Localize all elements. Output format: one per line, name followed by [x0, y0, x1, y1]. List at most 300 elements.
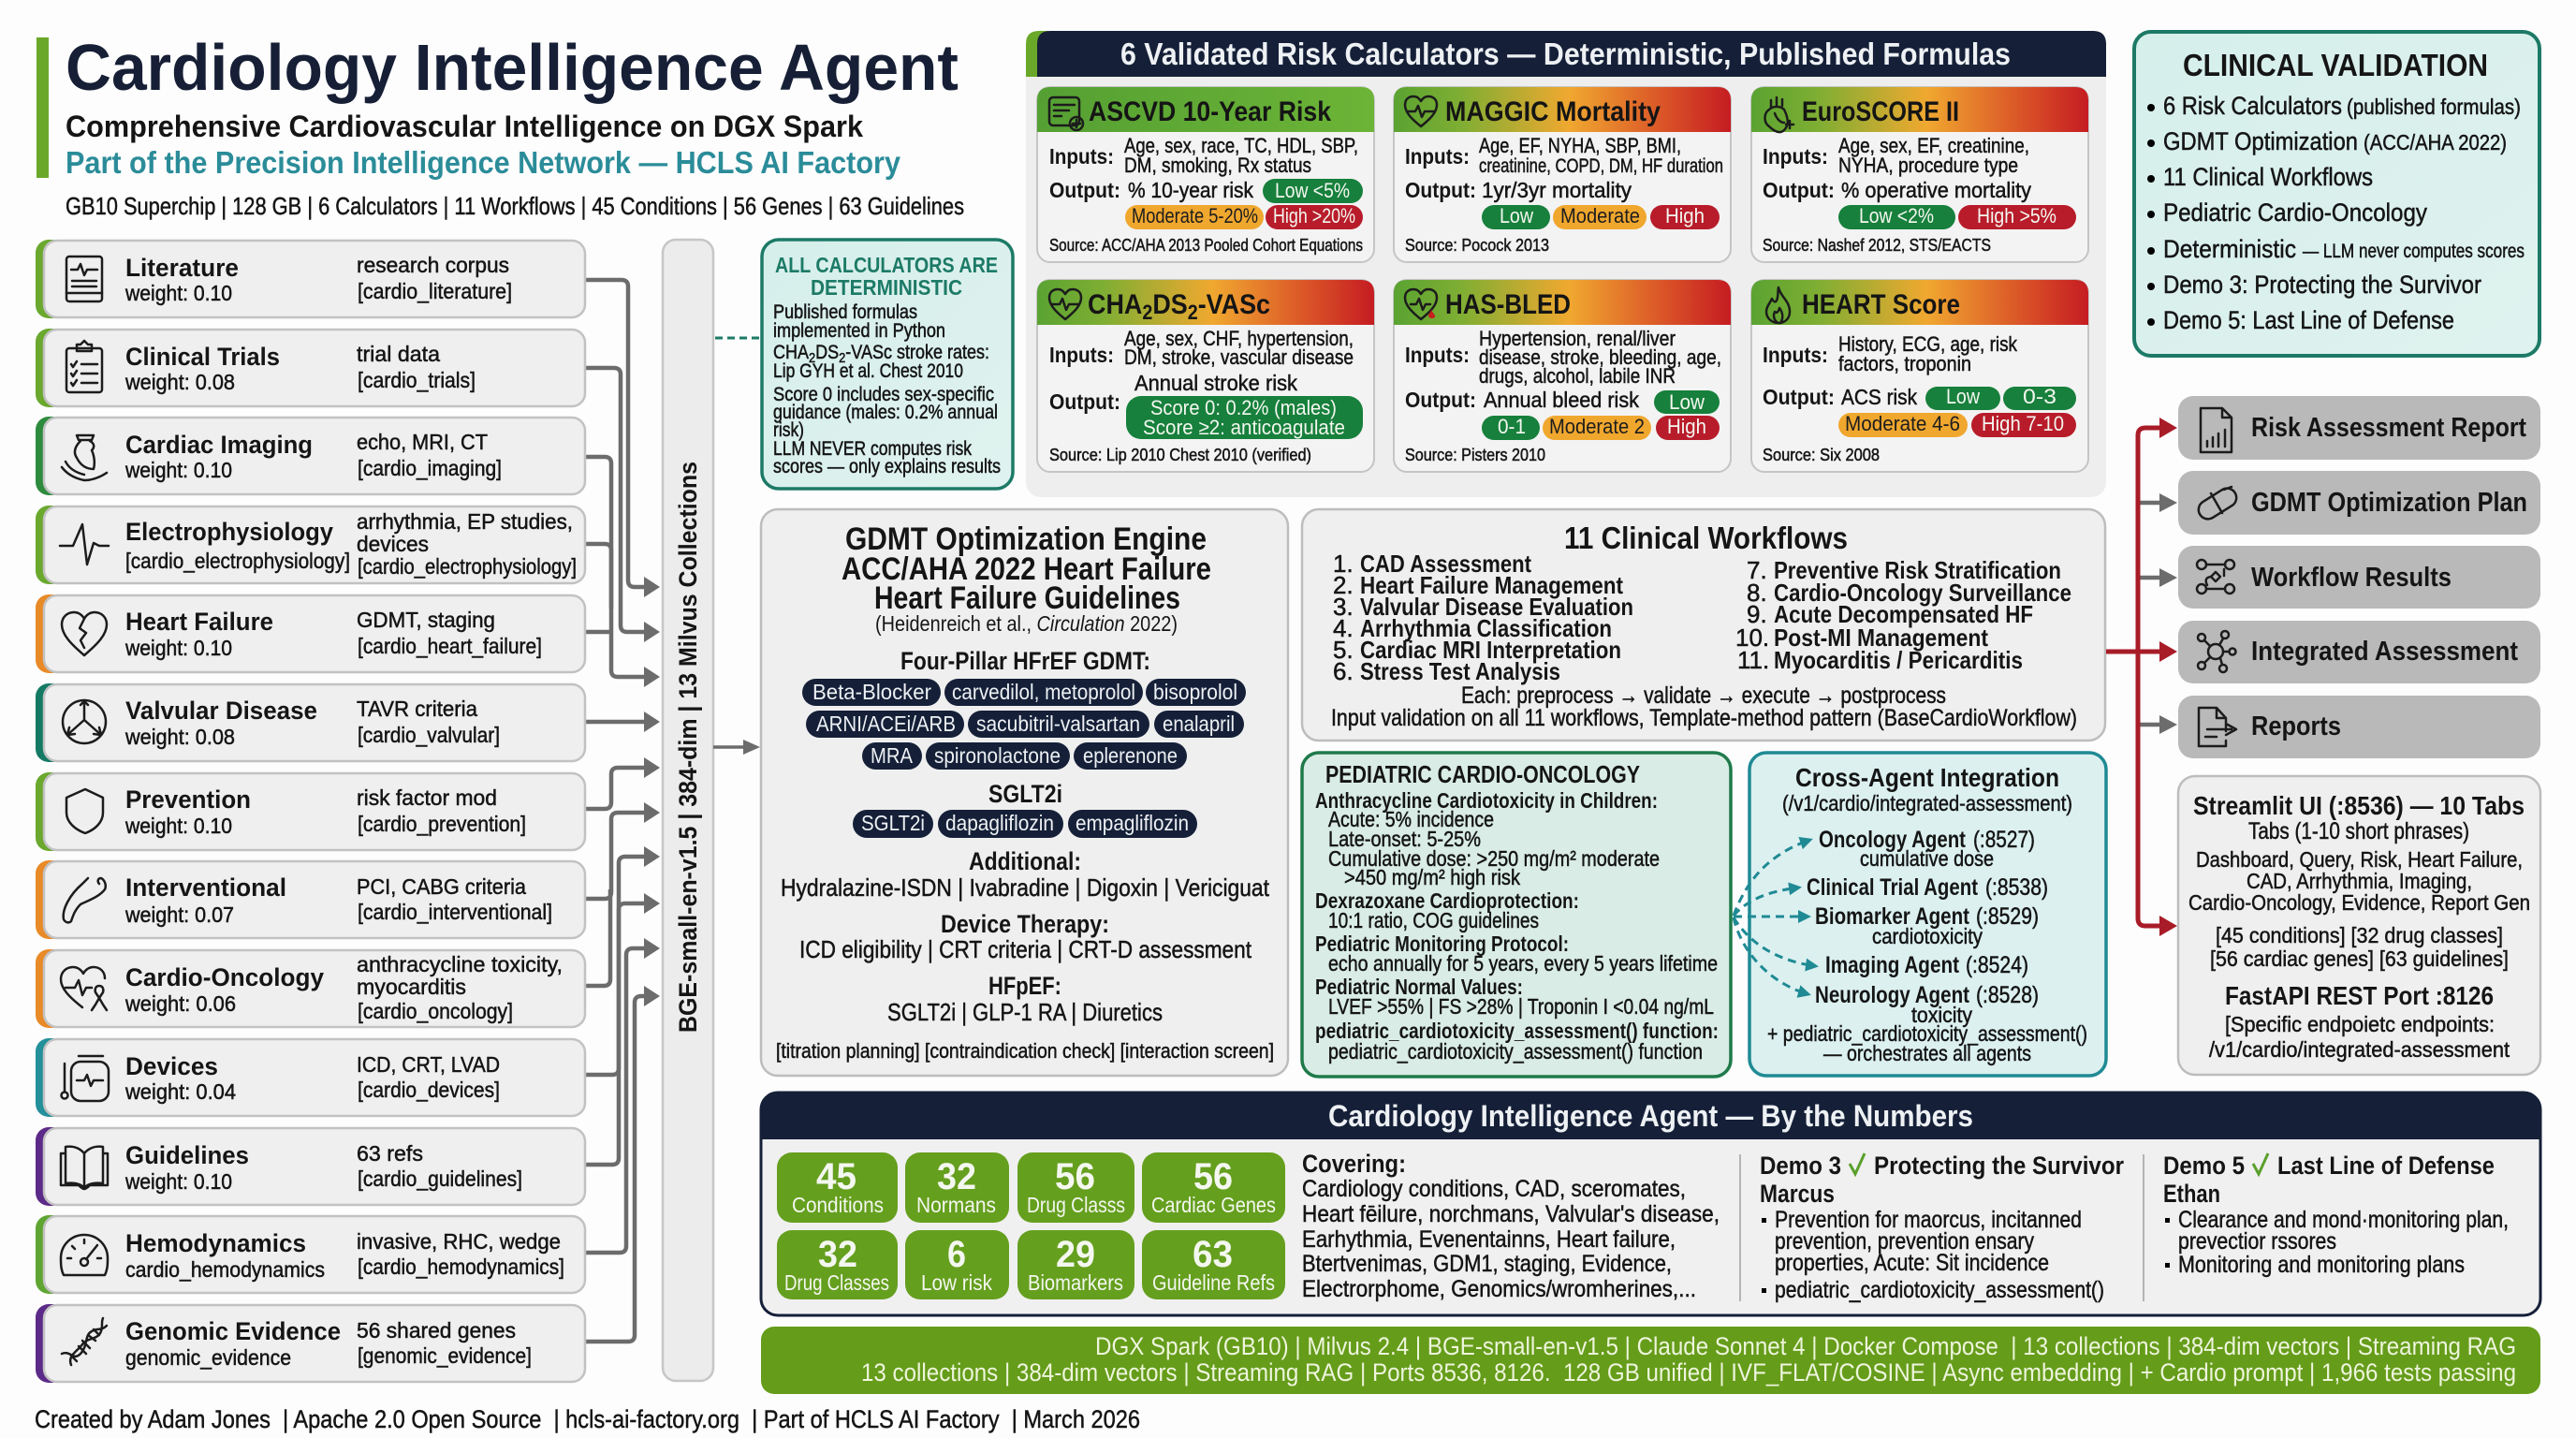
callout: all calculators are deterministic: guidance (males: 0.2% annual: [773, 402, 998, 423]
panel: pediatric cardio-oncology: pediatric_cardiotoxicity_assessment() function:: [1315, 1019, 1719, 1043]
demo 5: Last Line of Defense: [2277, 1152, 2495, 1180]
collection: Genomic Evidence: Genomic Evidence: [125, 1317, 341, 1345]
output: GDMT Optimization Plan: [2178, 471, 2540, 535]
collection: Electrophysiology: [cardio_electrophysiology]: [125, 549, 350, 573]
covering list: Btertvenimas, GDM1, staging, Evidence,: [1302, 1251, 1672, 1277]
title: Cardiology Intelligence Agent: [66, 31, 959, 104]
card: HEART Score: Low: [1946, 385, 1980, 408]
card: MAGGIC: Inputs:: [1405, 144, 1470, 169]
callout: all calculators are deterministic: -VASc stroke rates:: [845, 342, 989, 363]
drug pills: pillars: sacubitril-valsartan: [976, 712, 1140, 736]
stat tiles: [777, 1152, 1285, 1299]
output: Workflow Results: [2178, 546, 2540, 609]
card: CHA2DS2-VASc: DS: [1152, 289, 1188, 320]
panel: clinical workflows: Cardio-Oncology Surveillance: [1774, 579, 2071, 607]
demo 3: Demo 3: [1760, 1152, 1841, 1180]
drug pills: pillars: eplerenone: [1083, 743, 1178, 768]
icon: ECG trace: [60, 524, 109, 565]
panel: pediatric cardio-oncology: Pediatric Normal Values:: [1315, 975, 1523, 999]
collection: Clinical Trials: [36, 329, 585, 407]
card: CHA2DS2-VASc: 2: [1142, 301, 1152, 324]
card: EuroSCORE II: High >5%: [1977, 204, 2056, 227]
collection: Cardio-Oncology: weight: 0.06: [124, 991, 236, 1016]
panel: GDMT optimization engine: Four-Pillar HFrEF GDMT:: [900, 647, 1150, 675]
card: HAS-BLED: disease, stroke, bleeding, age,: [1479, 345, 1721, 369]
card: HAS-BLED: HAS-BLED: [1445, 289, 1571, 320]
collection: Clinical Trials: Clinical Trials: [125, 343, 280, 371]
panel: pediatric cardio-oncology: Anthracycline Cardiotoxicity in Children:: [1315, 788, 1658, 813]
card: MAGGIC: [1394, 87, 1731, 262]
collection: Interventional: [cardio_interventional]: [358, 900, 552, 924]
callout: all calculators are deterministic: LLM NEVER computes risk: [773, 438, 972, 460]
panel: Streamlit UI and FastAPI: [56 cardiac genes] [63 guidelines]: [2210, 946, 2509, 971]
collection: Valvular Disease: Valvular Disease: [125, 697, 317, 725]
stats line: GB10 Superchip | 128 GB | 6 Calculators | 11 Workflows | 45 Conditions | 56 Genes | 63 Guidelines: [66, 192, 964, 220]
panel: clinical validation: Deterministic: [2163, 235, 2296, 263]
callout: all calculators are deterministic: Published formulas: [773, 301, 917, 323]
panel: cross-agent integration: [1734, 753, 2106, 1076]
collection: Prevention: [cardio_prevention]: [358, 812, 526, 836]
icon: catheter: [64, 878, 106, 922]
icon: shield: [66, 789, 103, 833]
panel: Streamlit UI and FastAPI: [45 conditions] [32 drug classes]: [2216, 923, 2503, 947]
panel: clinical workflows: [1302, 509, 2105, 741]
panel: GDMT optimization engine: HFpEF:: [988, 972, 1061, 1000]
collection: Electrophysiology: [36, 506, 585, 584]
collection: Heart Failure: [cardio_heart_failure]: [358, 634, 542, 658]
card: HEART Score: HEART Score: [1802, 289, 1960, 320]
card: HEART Score: Moderate 4-6: [1845, 412, 1960, 435]
icon: clipboard plus: [1049, 97, 1083, 130]
covering list: Cardiology conditions, CAD, sceromates,: [1302, 1176, 1686, 1202]
collection: Hemodynamics: Hemodynamics: [125, 1229, 306, 1257]
card: CHA2DS2-VASc: -VASc: [1198, 289, 1270, 320]
collection: Valvular Disease: [36, 683, 585, 762]
dashed agent arrows: [1734, 840, 1816, 994]
collection: Heart Failure: [36, 594, 585, 673]
panel: clinical workflows: Input validation on all 11 workflows, Template-method pattern (BaseCardioWorkflow): [1331, 705, 2077, 731]
output: Workflow Results: Workflow Results: [2251, 563, 2452, 593]
panel: clinical workflows: 3.: [1333, 593, 1354, 621]
card: HEART Score: Inputs:: [1763, 343, 1828, 367]
drug pills: SGLT2i: dapagliflozin: [945, 811, 1054, 835]
collection: Clinical Trials: [cardio_trials]: [358, 368, 476, 392]
card: HEART Score: Source: Six 2008: [1763, 446, 1880, 464]
card: HAS-BLED: Moderate 2: [1549, 415, 1645, 438]
panel: Streamlit UI and FastAPI: Tabs (1-10 short phrases): [2248, 818, 2469, 844]
demo 3: Prevention for maorcus, incitanned: [1775, 1207, 2082, 1233]
panel: pediatric cardio-oncology: >450 mg/m² high risk: [1344, 865, 1520, 889]
panel: knowledge collections: [36, 240, 585, 1383]
stat tiles: Drug Classes: [784, 1270, 889, 1295]
card: HAS-BLED: drugs, alcohol, labile INR: [1479, 364, 1676, 388]
card: CHA2DS2-VASc: Inputs:: [1049, 343, 1114, 367]
panel: cross-agent integration: toxicity: [1911, 1003, 1972, 1027]
collection: Literature: research corpus: [357, 253, 509, 277]
panel: clinical workflows: Myocarditis / Pericarditis: [1774, 646, 2023, 674]
card: HAS-BLED: 0-1: [1498, 415, 1526, 438]
panel: cross-agent integration: (:8529): [1976, 903, 2039, 930]
collection: Electrophysiology: devices: [357, 532, 429, 556]
calculators header band: [1026, 31, 2106, 77]
demo 3: properties, Acute: Sit incidence: [1775, 1250, 2049, 1276]
card: ASCVD: [1037, 87, 1374, 262]
stat tiles: 6: [947, 1234, 966, 1275]
panel: Streamlit UI and FastAPI: /v1/cardio/integrated-assessment: [2209, 1037, 2510, 1062]
collection: Devices: [36, 1038, 585, 1117]
demo 5: Ethan: [2163, 1180, 2220, 1208]
panel: cross-agent integration: Neurology Agent: [1815, 982, 1970, 1008]
panel: GDMT optimization engine: Hydralazine-ISDN | Ivabradine | Digoxin | Vericiguat: [781, 873, 1270, 902]
collection: Heart Failure: GDMT, staging: [357, 608, 495, 632]
collection: Cardio-Oncology: myocarditis: [357, 975, 466, 999]
card: ASCVD: Source: ACC/AHA 2013 Pooled Cohort Equations: [1049, 236, 1363, 255]
card: EuroSCORE II: Low <2%: [1859, 204, 1934, 227]
output: Reports: Reports: [2251, 712, 2341, 741]
callout: all calculators are deterministic: DS: [815, 342, 839, 363]
icon: heart with blood drop: [1405, 289, 1437, 319]
embedding spine: BGE-small-en-v1.5 | 384-dim | 13 Milvus Collections: [674, 462, 702, 1033]
panel: cross-agent integration: (/v1/cardio/integrated-assessment): [1782, 791, 2072, 815]
callout: all calculators are deterministic: [762, 240, 1013, 489]
output: Risk Assessment Report: [2178, 396, 2540, 460]
card: HAS-BLED: Hypertension, renal/liver: [1479, 327, 1676, 350]
panel: clinical workflows: 11 Clinical Workflows: [1564, 521, 1848, 555]
collection: Electrophysiology: arrhythmia, EP studies,: [357, 509, 573, 534]
stat tiles: Cardiac Genes: [1151, 1193, 1276, 1217]
card: EuroSCORE II: Age, sex, EF, creatinine,: [1838, 134, 2029, 157]
output: Integrated Assessment: [2178, 621, 2540, 683]
callout: all calculators are deterministic: ALL CALCULATORS ARE: [775, 253, 998, 277]
card: HAS-BLED: Source: Pisters 2010: [1405, 446, 1545, 464]
card: ASCVD: ASCVD 10-Year Risk: [1089, 96, 1331, 127]
drug pills: pillars: carvedilol, metoprolol: [952, 680, 1135, 704]
card: MAGGIC: Age, EF, NYHA, SBP, BMI,: [1479, 134, 1681, 157]
panel: GDMT optimization engine: SGLT2i: [988, 780, 1062, 808]
arrow: spine to GDMT: [713, 740, 760, 755]
stat tiles: Conditions: [792, 1193, 884, 1217]
card: ASCVD: Output:: [1049, 178, 1120, 202]
stat tiles: 56: [1055, 1156, 1095, 1197]
collection: Cardiac Imaging: [36, 417, 585, 495]
panel: GDMT optimization engine: ICD eligibility | CRT criteria | CRT-D assessment: [799, 935, 1252, 963]
icon: clipboard: [66, 341, 102, 392]
card: HEART Score: factors, troponin: [1838, 352, 1971, 375]
callout: all calculators are deterministic: 2: [809, 350, 815, 366]
drug pills: pillars: Beta-Blocker: [812, 680, 931, 704]
panel: GDMT optimization engine: (Heidenreich et al., Circulation 2022): [875, 611, 1178, 636]
collection: Interventional: Interventional: [125, 873, 286, 902]
collection: Cardiac Imaging: Cardiac Imaging: [125, 431, 313, 459]
panel: GDMT optimization engine: Device Therapy:: [941, 910, 1109, 938]
panel: clinical validation: 11 Clinical Workflows: [2163, 163, 2373, 191]
collection: Interventional: PCI, CABG criteria: [357, 874, 526, 899]
panel: clinical workflows: 2.: [1333, 571, 1354, 599]
panel: pediatric cardio-oncology: PEDIATRIC CARDIO-ONCOLOGY: [1325, 760, 1640, 788]
icon: pressure gauge: [61, 1235, 108, 1275]
card: MAGGIC: Moderate: [1560, 204, 1640, 227]
collection: Prevention: Prevention: [125, 785, 251, 814]
card: CHA2DS2-VASc: Annual stroke risk: [1134, 371, 1297, 395]
callout: all calculators are deterministic: 2: [839, 350, 845, 366]
panel: pediatric cardio-oncology: echo annually for 5 years, every 5 years lifetime: [1328, 951, 1718, 976]
collection: Literature: [36, 240, 585, 318]
collection: Heart Failure: Heart Failure: [125, 608, 273, 636]
output: GDMT Optimization Plan: GDMT Optimization Plan: [2251, 488, 2527, 518]
panel: clinical workflows: 4.: [1333, 614, 1354, 642]
stat tiles: Guideline Refs: [1152, 1270, 1275, 1295]
drug pills: pillars: [802, 679, 1246, 770]
collection: Hemodynamics: [cardio_hemodynamics]: [358, 1255, 564, 1279]
card: CHA2DS2-VASc: CHA: [1088, 289, 1149, 320]
demo 5: Clearance and mond·monitoring plan,: [2178, 1207, 2509, 1233]
stat tiles: Low risk: [921, 1270, 992, 1295]
arrows: engine to outputs: [2106, 418, 2177, 936]
panel: pediatric cardio-oncology: Acute: 5% incidence: [1328, 807, 1494, 831]
collection: Valvular Disease: weight: 0.08: [124, 725, 235, 749]
panel: clinical workflows: Cardiac MRI Interpretation: [1360, 636, 1621, 664]
drug pills: SGLT2i: [853, 810, 1197, 838]
panel: clinical workflows: Stress Test Analysis: [1360, 657, 1560, 685]
panel: clinical workflows: Arrhythmia Classification: [1360, 614, 1612, 642]
collection: Interventional: weight: 0.07: [124, 902, 234, 927]
panel: clinical validation: GDMT Optimization: [2163, 127, 2358, 155]
panel: clinical workflows: Acute Decompensated HF: [1774, 600, 2033, 628]
panel: clinical workflows: 7.: [1747, 556, 1767, 584]
covering list: [1302, 1150, 1720, 1302]
subtitle: Comprehensive Cardiovascular Intelligence on DGX Spark: [66, 110, 863, 143]
drug pills: pillars: spironolactone: [934, 743, 1061, 768]
card: CHA2DS2-VASc: Output:: [1049, 389, 1120, 414]
callout: all calculators are deterministic: risk): [773, 419, 804, 441]
collection: Cardio-Oncology: anthracycline toxicity,: [357, 952, 563, 976]
collection: Devices: [cardio_devices]: [358, 1078, 500, 1102]
icon: capsule: [2195, 485, 2240, 522]
card: EuroSCORE II: Inputs:: [1763, 144, 1828, 169]
panel: clinical validation: [2134, 32, 2539, 356]
icon: literature document: [66, 257, 102, 301]
panel: cross-agent integration: — orchestrates all agents: [1823, 1041, 2031, 1065]
card: MAGGIC: Low: [1500, 204, 1533, 227]
connector arrows: collections to embedding spine: [585, 280, 660, 1342]
card: ASCVD: Inputs:: [1049, 144, 1114, 169]
panel: clinical workflows: Each: preprocess → validate → execute → postprocess: [1461, 682, 1946, 709]
icon: DNA helix: [62, 1318, 107, 1365]
demo 3: pediatric_cardiotoxicity_assessment(): [1775, 1277, 2104, 1303]
panel: cross-agent integration: Cross-Agent Integration: [1795, 763, 2059, 792]
network tagline: Part of the Precision Intelligence Network — HCLS AI Factory: [66, 145, 901, 180]
panel: cross-agent integration: cardiotoxicity: [1872, 924, 1983, 948]
stat tiles: 63: [1193, 1234, 1233, 1275]
panel: clinical workflows: Preventive Risk Stratification: [1774, 556, 2061, 584]
panel: cross-agent integration: Clinical Trial Agent: [1807, 874, 1979, 901]
card: ASCVD: Moderate 5-20%: [1132, 204, 1258, 227]
covering list: Electrorphome, Genomics/wromherines,...: [1302, 1276, 1696, 1302]
stat tiles: 32: [818, 1234, 857, 1275]
panel: clinical validation: Pediatric Cardio-Oncology: [2163, 198, 2427, 227]
card: ASCVD: Age, sex, race, TC, HDL, SBP,: [1124, 134, 1358, 157]
demo 3: [1760, 1152, 2124, 1303]
collection: Guidelines: weight: 0.10: [124, 1169, 232, 1194]
collection: Genomic Evidence: [36, 1304, 585, 1383]
demo 3: Marcus: [1760, 1180, 1835, 1208]
stat tiles: 56: [1193, 1156, 1233, 1197]
icon: report chart: [2201, 408, 2232, 452]
panel: GDMT optimization engine: [761, 509, 1288, 1076]
collection: Literature: Literature: [125, 254, 239, 282]
calculators header band: 6 Validated Risk Calculators — Deterministic, Published Formulas: [1120, 37, 2011, 71]
icon: workflow nodes: [2197, 560, 2234, 594]
panel: pediatric cardio-oncology: LVEF >55% | FS >28% | Troponin I <0.04 ng/mL: [1328, 994, 1714, 1019]
demo 5: Demo 5: [2163, 1152, 2245, 1180]
card: MAGGIC: Source: Pocock 2013: [1405, 236, 1549, 255]
panel: clinical workflows: Post-MI Management: [1774, 624, 1988, 652]
card: MAGGIC: 1yr/3yr mortality: [1482, 178, 1632, 202]
stat tiles: Drug Classs: [1027, 1193, 1125, 1217]
panel: cross-agent integration: Oncology Agent: [1819, 827, 1967, 853]
card: MAGGIC: creatinine, COPD, DM, HF duration: [1479, 155, 1723, 177]
collection: Valvular Disease: [cardio_valvular]: [358, 723, 500, 747]
icon: open book: [61, 1147, 108, 1189]
card: HAS-BLED: Annual bleed risk: [1484, 388, 1639, 412]
demo 5: prevectior rssores: [2178, 1228, 2336, 1255]
card: HAS-BLED: [1394, 280, 1731, 472]
panel: pediatric cardio-oncology: [1302, 753, 1731, 1077]
card: EuroSCORE II: Output:: [1763, 178, 1835, 202]
panel: GDMT optimization engine: Heart Failure Guidelines: [874, 580, 1180, 616]
card: EuroSCORE II: % operative mortality: [1841, 178, 2031, 202]
collection: Genomic Evidence: 56 shared genes: [357, 1318, 516, 1343]
collection: Genomic Evidence: [genomic_evidence]: [358, 1343, 532, 1368]
tech stack bar: [761, 1327, 2540, 1394]
collection: Cardiac Imaging: weight: 0.10: [124, 458, 232, 482]
card: CHA2DS2-VASc: 2: [1188, 301, 1198, 324]
panel: clinical validation: (ACC/AHA 2022): [2364, 130, 2507, 154]
collection: Heart Failure: weight: 0.10: [124, 636, 232, 660]
drug pills: SGLT2i: SGLT2i: [861, 811, 925, 835]
panel: by the numbers: [761, 1093, 2540, 1315]
panel: cross-agent integration: (:8528): [1976, 982, 2039, 1008]
panel: clinical workflows: 5.: [1333, 636, 1354, 664]
callout: all calculators are deterministic: CHA: [773, 342, 814, 363]
icon: implantable device: [62, 1056, 109, 1101]
panel: clinical validation: CLINICAL VALIDATION: [2183, 48, 2488, 82]
card: HEART Score: High 7-10: [1982, 412, 2064, 435]
icon: heart pulse: [1405, 96, 1437, 126]
output: Integrated Assessment: Integrated Assessment: [2251, 637, 2518, 667]
connector: deterministic callout dashed link: [715, 337, 762, 339]
demo 5: Monitoring and monitoring plans: [2178, 1252, 2465, 1278]
panel: clinical workflows: 10.: [1735, 624, 1769, 652]
collection: Cardio-Oncology: [cardio_oncology]: [358, 999, 513, 1023]
card: CHA2DS2-VASc: Score 0: 0.2% (males): [1150, 396, 1337, 419]
collection: Literature: [cardio_literature]: [358, 279, 512, 303]
panel: pediatric cardio-oncology: pediatric_cardiotoxicity_assessment() function: [1328, 1039, 1703, 1064]
collection: Literature: weight: 0.10: [124, 281, 232, 305]
panel: cross-agent integration: (:8524): [1966, 952, 2028, 978]
card: ASCVD: DM, smoking, Rx status: [1124, 154, 1311, 177]
stat tiles: Biomarkers: [1028, 1270, 1123, 1295]
collection: Devices: weight: 0.04: [124, 1079, 236, 1104]
callout: all calculators are deterministic: Lip GYH et al. Chest 2010: [773, 360, 963, 382]
collection: Prevention: risk factor mod: [357, 785, 497, 810]
card: CHA2DS2-VASc: DM, stroke, vascular disease: [1124, 345, 1354, 369]
collection: Hemodynamics: [36, 1215, 585, 1294]
collection: Guidelines: 63 refs: [357, 1141, 423, 1166]
panel: clinical workflows: 9.: [1747, 600, 1767, 628]
card: HAS-BLED: Low: [1669, 390, 1705, 414]
panel: cross-agent integration: Imaging Agent: [1825, 952, 1960, 978]
card: ASCVD: Low <5%: [1275, 179, 1350, 202]
card: HAS-BLED: Output:: [1405, 388, 1476, 412]
callout: all calculators are deterministic: Score 0 includes sex-specific: [773, 384, 994, 405]
panel: Streamlit UI and FastAPI: CAD, Arrhythmia, Imaging,: [2247, 869, 2472, 893]
collection: Devices: Devices: [125, 1052, 218, 1080]
callout: all calculators are deterministic: scores — only explains results: [773, 456, 1001, 477]
collection: Valvular Disease: TAVR criteria: [357, 697, 477, 721]
collection: Interventional: [36, 860, 585, 939]
covering list: Earhythmia, Evenentainns, Heart failure,: [1302, 1226, 1676, 1253]
callout: all calculators are deterministic: DETERMINISTIC: [811, 275, 962, 300]
card: MAGGIC: High: [1665, 204, 1705, 227]
panel: cross-agent integration: cumulative dose: [1860, 846, 1994, 871]
embedding spine: [663, 240, 713, 1381]
icon: anatomical heart: [1765, 97, 1793, 132]
drug pills: pillars: enalapril: [1163, 712, 1235, 736]
demo 5: [2163, 1152, 2509, 1278]
panel: clinical validation: 6 Risk Calculators: [2163, 92, 2342, 120]
footer credits: Created by Adam Jones | Apache 2.0 Open Source | hcls-ai-factory.org | Part of HCLS AI Factory | March 2026: [35, 1405, 1140, 1433]
icon: heart pulse: [1049, 289, 1081, 319]
card: ASCVD: High >20%: [1273, 204, 1355, 227]
panel: clinical validation: — LLM never computes scores: [2303, 241, 2525, 262]
panel: cross-agent integration: + pediatric_cardiotoxicity_assessment(): [1767, 1021, 2087, 1046]
panel: cross-agent integration: Biomarker Agent: [1815, 903, 1970, 930]
covering list: Heart fēilure, norchmans, Valvular's disease,: [1302, 1201, 1720, 1227]
collection: Prevention: [36, 772, 585, 851]
stat tiles: 29: [1056, 1234, 1095, 1275]
card: CHA2DS2-VASc: Score ≥2: anticoagulate: [1143, 416, 1345, 439]
icon: ultrasound probe: [62, 435, 107, 480]
panel: clinical workflows: 6.: [1333, 657, 1354, 685]
card: EuroSCORE II: EuroSCORE II: [1802, 96, 1959, 127]
card: EuroSCORE II: Source: Nashef 2012, STS/EACTS: [1763, 236, 1991, 255]
demo 3: Protecting the Survivor: [1874, 1152, 2124, 1180]
panel: GDMT optimization engine: ACC/AHA 2022 Heart Failure: [842, 551, 1211, 587]
output: Reports: [2178, 696, 2540, 758]
card: EuroSCORE II: [1751, 87, 2088, 262]
header accent bar: [37, 37, 49, 178]
panel: clinical workflows: CAD Assessment: [1360, 550, 1531, 578]
panel: cross-agent integration: (:8527): [1973, 827, 2035, 853]
panel: GDMT optimization engine: Additional:: [969, 847, 1081, 875]
icon: document export: [2199, 708, 2236, 746]
icon: hub network: [2198, 631, 2235, 672]
drug pills: SGLT2i: empagliflozin: [1076, 811, 1189, 835]
collection: Hemodynamics: cardio_hemodynamics: [125, 1257, 325, 1282]
collection: Devices: ICD, CRT, LVAD: [357, 1052, 500, 1077]
panel: GDMT optimization engine: [titration planning] [contraindication check] [interaction screen]: [776, 1039, 1274, 1063]
panel: Streamlit UI and FastAPI: Dashboard, Query, Risk, Heart Failure,: [2196, 847, 2523, 872]
collection: Cardiac Imaging: echo, MRI, CT: [357, 430, 488, 454]
panel: clinical workflows: 1.: [1333, 550, 1354, 578]
numbers header band: [761, 1093, 2540, 1139]
collection: Guidelines: [cardio_guidelines]: [358, 1167, 522, 1191]
card: HEART Score: [1751, 280, 2088, 472]
panel: clinical workflows: Heart Failure Management: [1360, 571, 1623, 599]
collection: Hemodynamics: invasive, RHC, wedge: [357, 1229, 561, 1254]
collection: Electrophysiology: [cardio_electrophysiology]: [358, 554, 577, 579]
